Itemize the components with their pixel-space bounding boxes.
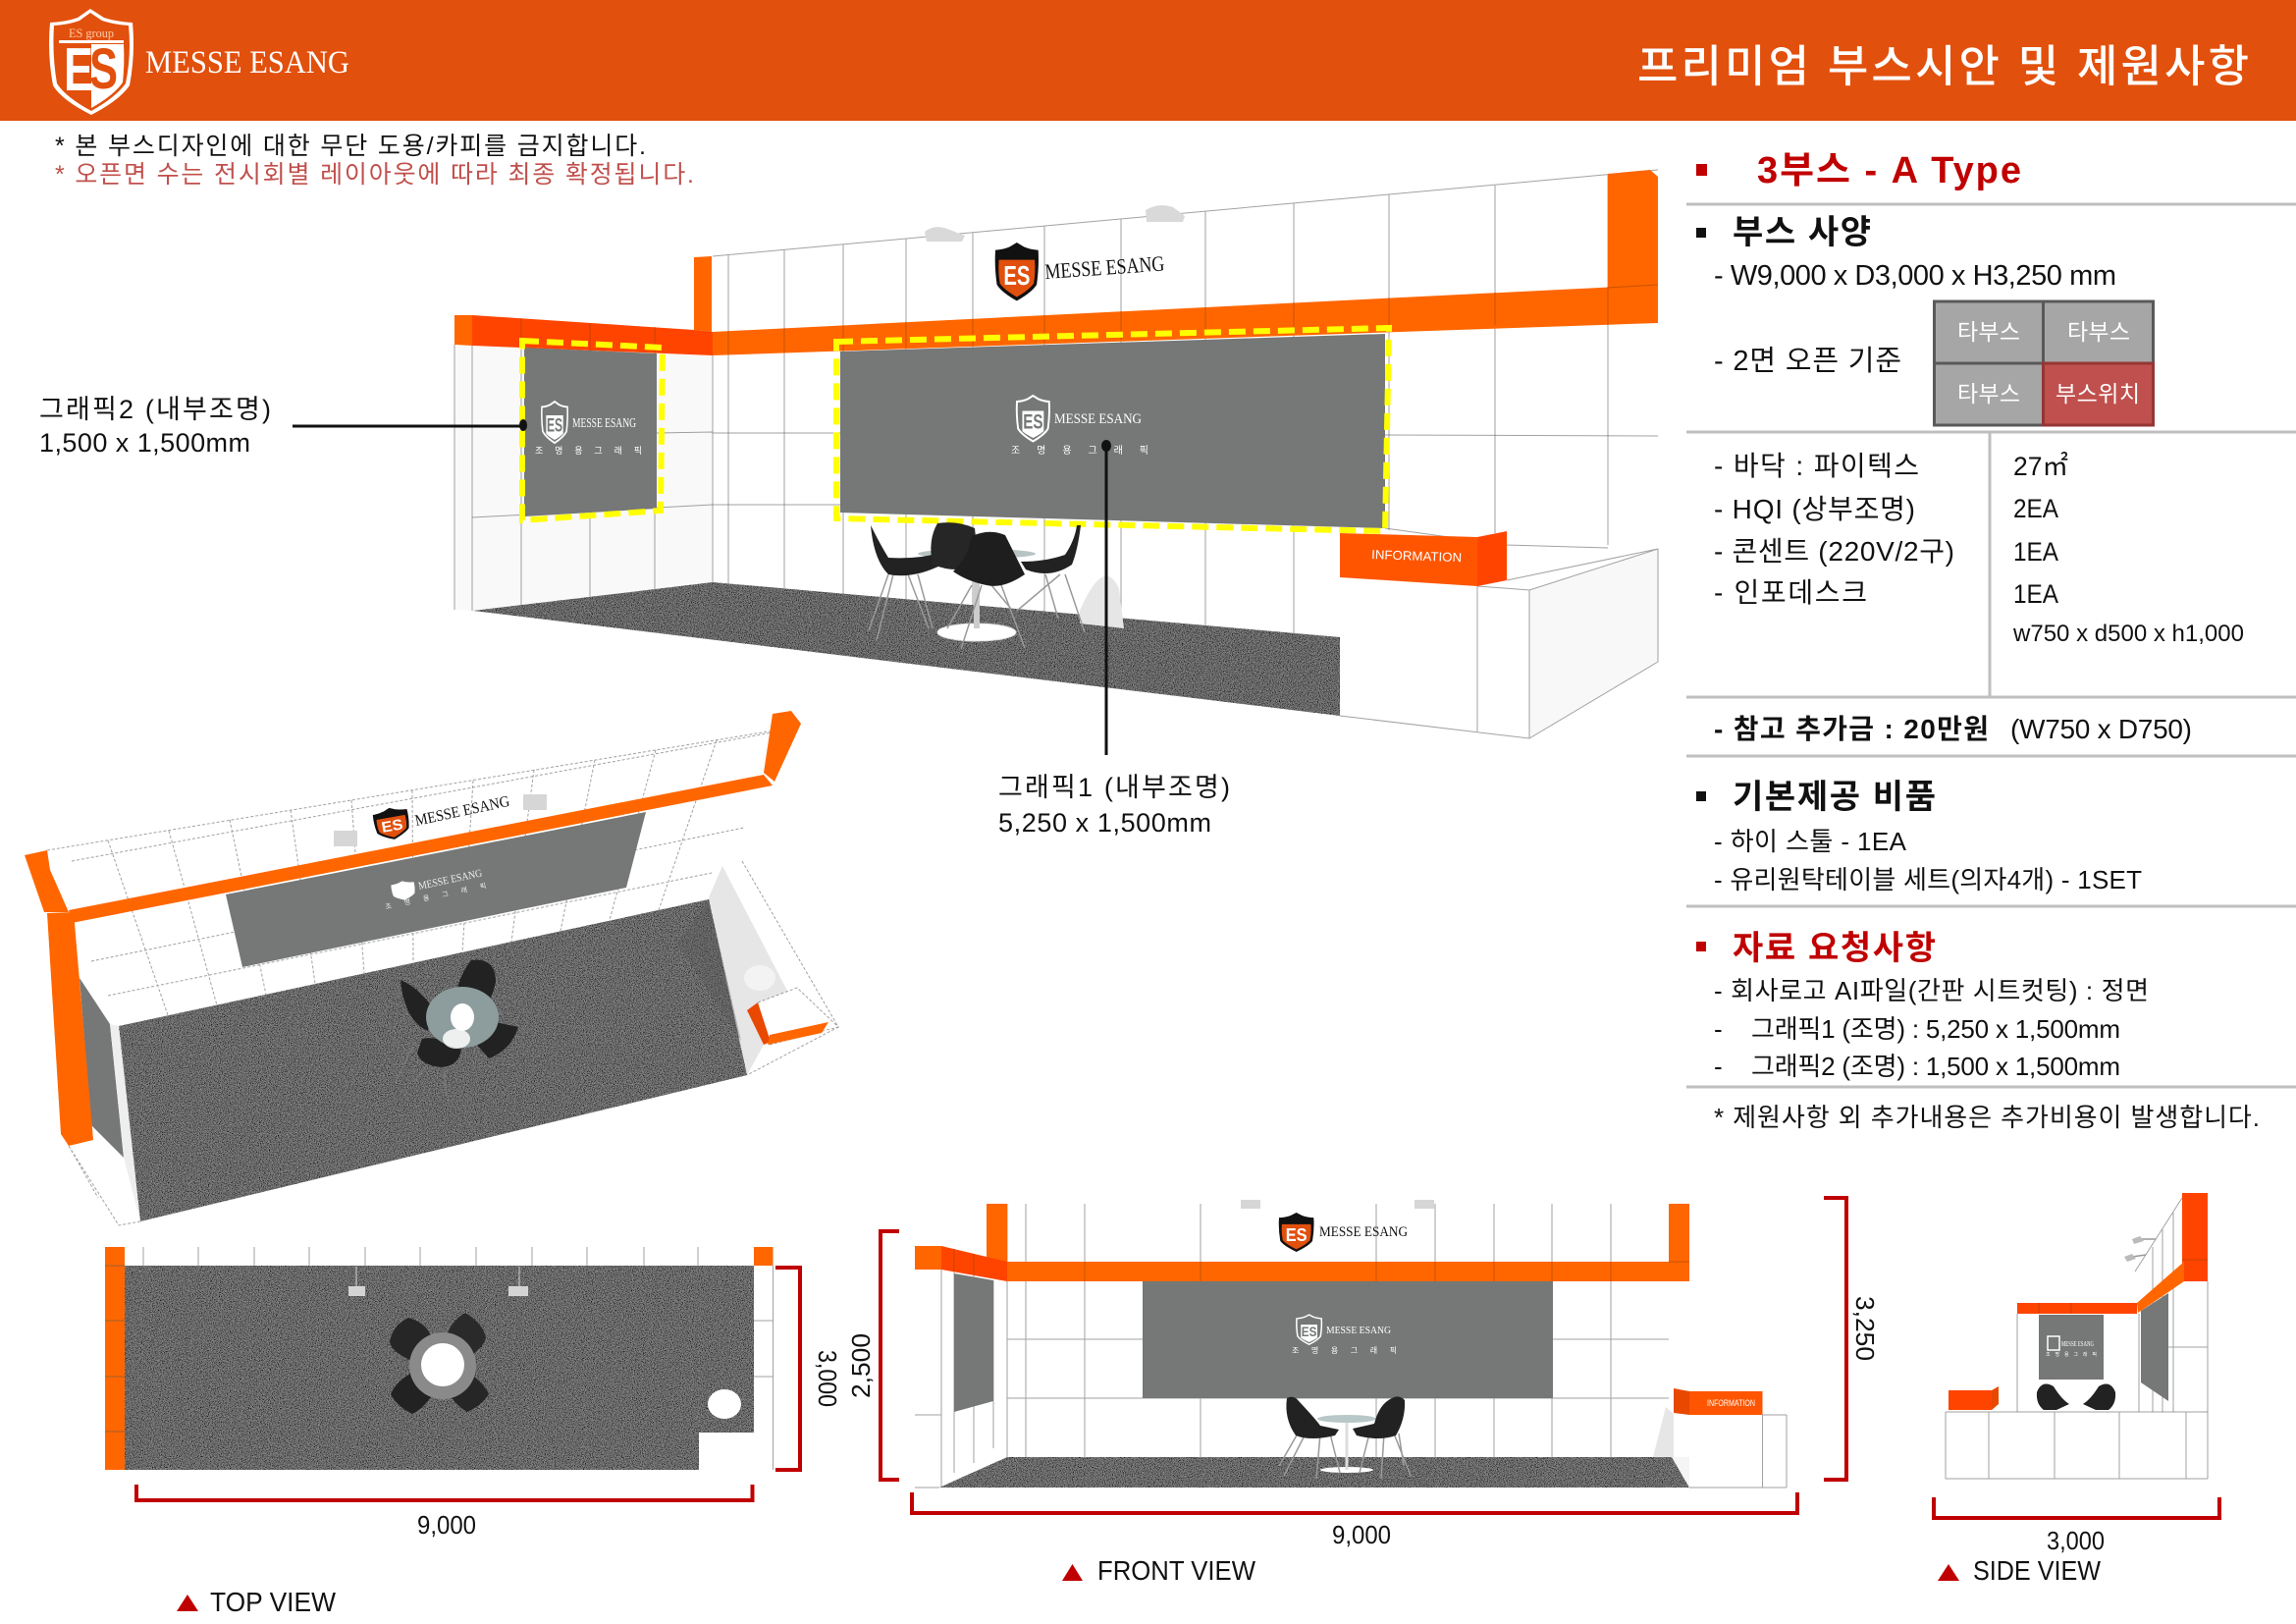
dimension: 3,000: 3,000 <box>813 1350 842 1407</box>
floor plan <box>125 1266 754 1470</box>
logo wordmark: MESSE ESANG <box>145 45 349 81</box>
spec list: - 바닥 : 파이텍스 <box>1714 451 1919 481</box>
side view label: SIDE VIEW <box>1973 1555 2102 1586</box>
graphic 2 logo <box>542 402 567 443</box>
dimension: 3,000: 3,000 <box>2047 1526 2105 1555</box>
desk plan <box>699 1433 754 1470</box>
lamps <box>2124 1236 2156 1262</box>
lamps <box>1241 1200 1434 1209</box>
callout: graphic 1: 5,250 x 1,500mm <box>998 808 1211 838</box>
callout: graphic 1: 그래픽1 (내부조명) <box>998 773 1230 802</box>
section: required materials: - <box>1714 1052 1723 1081</box>
footnote: * 제원사항 외 추가내용은 추가비용이 발생합니다. <box>1714 1103 2260 1132</box>
dimension: 3,000 <box>1934 1497 2219 1555</box>
orange frame <box>25 711 801 1146</box>
aerial lamps <box>334 794 547 846</box>
dimension: 3,250: 3,250 <box>1850 1296 1880 1361</box>
notice text: * 본 부스디자인에 대한 무단 도용/카피를 금지합니다. <box>55 133 646 160</box>
aerial logo: ES <box>380 815 404 836</box>
aerial graphic logo: 조 명 용 그 래 픽 <box>385 881 487 911</box>
table and chairs <box>1279 1396 1411 1479</box>
section: required materials: - 회사로고 AI파일(간판 시트컷팅) : 정면 <box>1714 976 2149 1005</box>
orange posts and back wall band <box>694 256 712 332</box>
lamps <box>348 1267 528 1296</box>
dimension: 3,000 <box>775 1268 842 1470</box>
floor shadow patch <box>677 899 741 1041</box>
orange frame <box>105 1247 125 1470</box>
chairs <box>2037 1384 2115 1410</box>
spec list: 2EA <box>2013 494 2058 523</box>
extra cost note: (W750 x D750) <box>2010 714 2192 744</box>
side graphic <box>2141 1293 2168 1401</box>
location grid: 타부스 <box>2067 319 2130 345</box>
callout: graphic 2: 그래픽2 (내부조명) <box>39 395 271 424</box>
section: basic items: 기본제공 비품 <box>1733 779 1936 816</box>
extra cost note <box>1714 714 2192 744</box>
table and chairs plan <box>390 1313 489 1414</box>
location grid <box>1934 301 2154 425</box>
section: required materials <box>1696 930 2149 1081</box>
callout: graphic 2 <box>39 395 527 458</box>
aerial table and chairs <box>396 960 518 1096</box>
front graphic <box>1143 1281 1553 1398</box>
graphic 2 logo: ES <box>547 414 562 436</box>
dimension: 2,500: 2,500 <box>846 1333 876 1398</box>
graphic 2 panel <box>522 341 663 520</box>
aerial logo <box>372 793 511 842</box>
section: booth spec: - 2면 오픈 기준 <box>1714 345 1901 377</box>
aerial desk <box>744 965 838 1045</box>
wall grid lines <box>47 730 838 1225</box>
graphic 1 panel: 조 명 용 그 래 픽 <box>1011 445 1148 457</box>
spec list: - 콘센트 (220V/2구) <box>1714 536 1954 567</box>
logo: ES group shield <box>49 9 133 115</box>
lamps <box>925 205 1185 242</box>
spec list: 27㎡ <box>2013 452 2068 481</box>
graphic 2 panel: MESSE ESANG <box>572 416 636 431</box>
location grid: 부스위치 <box>2056 381 2140 406</box>
location grid: 타부스 <box>1957 319 2020 345</box>
graphic 1 panel: MESSE ESANG <box>1054 411 1142 427</box>
dimension: 3,250 <box>1824 1198 1880 1480</box>
side graphic <box>954 1273 993 1412</box>
floor <box>473 582 1340 716</box>
main perspective booth view <box>454 170 1658 738</box>
section: basic items <box>1696 779 2142 894</box>
section: booth spec: - W9,000 x D3,000 x H3,250 mm <box>1714 260 2116 292</box>
spec list: - 인포데스크 <box>1714 577 1867 608</box>
graphic 1 logo <box>1017 396 1049 441</box>
wall outline <box>25 730 838 1225</box>
graphic 1 panel <box>836 328 1389 531</box>
wall logo: ES <box>1286 1225 1308 1246</box>
wall logo: ES <box>1003 260 1030 291</box>
top wall strip <box>143 1247 774 1470</box>
section: basic items: - 하이 스툴 - 1EA <box>1714 827 1907 856</box>
page title: 프리미엄 부스시안 및 제원사항 <box>1637 41 2249 91</box>
graphic 1 logo: ES <box>1023 410 1043 434</box>
spec list <box>1714 451 2244 647</box>
orange band <box>2017 1193 2208 1314</box>
spec panel <box>1686 150 2296 1132</box>
dimension: 9,000: 9,000 <box>1332 1520 1391 1549</box>
orange band and posts <box>915 1204 1689 1281</box>
notice text: * 오픈면 수는 전시회별 레이아웃에 따라 최종 확정됩니다. <box>55 161 694 189</box>
wall frame lines <box>454 170 1658 633</box>
location grid: 타부스 <box>1957 381 2020 406</box>
notice text <box>55 133 694 189</box>
header bar <box>0 0 2296 121</box>
spec list: - HQI (상부조명) <box>1714 494 1915 524</box>
logo: ES group shield: S <box>89 37 118 101</box>
wall logo <box>1279 1213 1408 1252</box>
extra cost note: - 참고 추가금 : 20만원 <box>1714 714 1989 744</box>
desk: INFORMATION <box>1707 1398 1755 1408</box>
back graphic: 조 명 용 그 래 픽 <box>2046 1351 2097 1358</box>
spec list: w750 x d500 x h1,000 <box>2012 621 2244 647</box>
dimension: 9,000 <box>912 1492 1797 1549</box>
front graphic: ES <box>1302 1325 1317 1340</box>
front view label: FRONT VIEW <box>1097 1555 1256 1586</box>
stool <box>708 1389 741 1419</box>
spec list: 1EA <box>2013 579 2058 609</box>
section: booth type: 3부스 - A Type <box>1757 150 2021 191</box>
dimension: 9,000 <box>136 1485 752 1540</box>
wall lines <box>915 1204 1669 1488</box>
side view <box>1934 1193 2219 1586</box>
wall graphic <box>226 812 646 967</box>
section: required materials: - <box>1714 1014 1723 1044</box>
aerial logo: MESSE ESANG <box>413 793 511 830</box>
spec list: 1EA <box>2013 537 2058 567</box>
section: basic items: - 유리원탁테이블 세트(의자4개) - 1SET <box>1714 865 2142 894</box>
wall logo: MESSE ESANG <box>1319 1224 1408 1240</box>
logo: ES group shield: E <box>64 36 93 104</box>
information desk: INFORMATION <box>1371 547 1462 565</box>
floor <box>939 1457 1689 1488</box>
section: required materials: 그래픽1 (조명) : 5,250 x 1,500mm <box>1751 1014 2120 1044</box>
back graphic <box>2039 1315 2104 1380</box>
desk <box>1653 1388 1787 1488</box>
front graphic: 조 명 용 그 래 픽 <box>1292 1345 1397 1355</box>
aerial graphic logo <box>385 867 487 911</box>
table and chairs <box>869 522 1085 649</box>
section: required materials: 그래픽2 (조명) : 1,500 x 1,500mm <box>1751 1052 2120 1081</box>
wall lines <box>2017 1198 2208 1479</box>
desk box <box>1946 1412 2208 1479</box>
section: booth spec <box>1696 214 2116 377</box>
shadow shapes <box>1080 576 1124 628</box>
top view label: TOP VIEW <box>210 1587 337 1617</box>
side wall shade <box>709 866 788 1075</box>
logo: ES group shield: ES group <box>69 26 114 40</box>
wall logo: MESSE ESANG <box>1044 251 1165 284</box>
back graphic: MESSE ESANG <box>2061 1340 2094 1348</box>
callout: graphic 1 <box>998 440 1230 838</box>
wall logo <box>995 243 1165 300</box>
section: required materials: 자료 요청사항 <box>1733 930 1936 967</box>
floor <box>119 899 747 1221</box>
left return band <box>454 315 472 346</box>
callout: graphic 2: 1,500 x 1,500mm <box>39 428 250 458</box>
graphic 2 panel: 조 명 용 그 래 픽 <box>535 446 642 456</box>
dimension: 2,500 <box>846 1231 899 1480</box>
dimension: 9,000: 9,000 <box>417 1510 476 1540</box>
aerial perspective view <box>25 711 838 1225</box>
front graphic: MESSE ESANG <box>1326 1325 1391 1336</box>
aerial graphic logo: MESSE ESANG <box>417 867 483 893</box>
left wall graphic <box>80 978 124 1158</box>
section: booth spec: 부스 사양 <box>1733 214 1871 251</box>
desk <box>1949 1386 1999 1410</box>
top view <box>105 1247 842 1617</box>
front view <box>846 1198 1880 1586</box>
left wall <box>454 346 713 611</box>
information desk <box>1340 531 1658 738</box>
